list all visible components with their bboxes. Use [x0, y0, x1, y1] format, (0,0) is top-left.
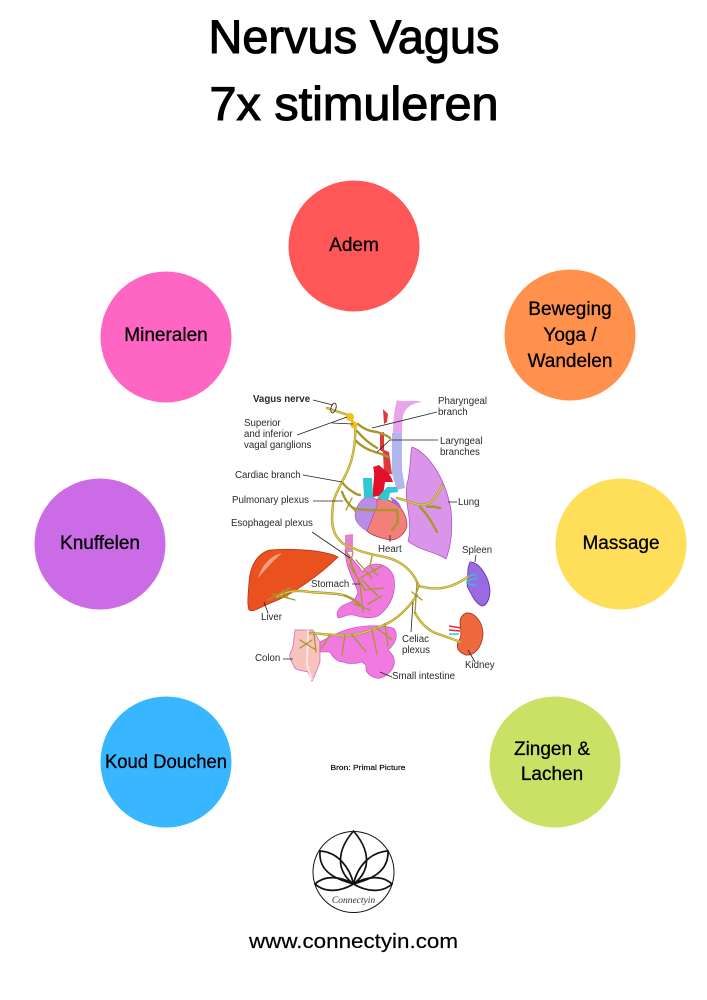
circle: Beweging Yoga / Wandelen: Beweging — [528, 299, 612, 320]
circle: Zingen & Lachen: Lachen — [521, 764, 583, 785]
circle: Beweging Yoga / Wandelen — [504, 270, 636, 400]
website url: www.connectyin.com — [248, 930, 458, 953]
anatomical diagram: vagus nerve: Laryngeal — [440, 436, 483, 447]
circle: Mineralen: Mineralen — [124, 325, 208, 346]
anatomical diagram: vagus nerve: Kidney — [465, 660, 495, 671]
leader lines — [264, 400, 476, 677]
title: Nervus Vagus — [208, 10, 500, 63]
anatomical diagram: vagus nerve: Heart — [378, 544, 402, 555]
title: 7x stimuleren — [210, 77, 498, 130]
anatomical diagram: vagus nerve: branches — [440, 447, 480, 458]
anatomical diagram: vagus nerve: Colon — [255, 653, 280, 664]
organ: kidney — [457, 613, 483, 655]
anatomical diagram: vagus nerve: Pulmonary plexus — [232, 495, 309, 506]
logo: Connectyin lotus — [313, 831, 394, 912]
circle: Beweging Yoga / Wandelen: Wandelen — [528, 351, 612, 372]
circle: Beweging Yoga / Wandelen: Yoga / — [543, 325, 597, 346]
anatomical diagram: vagus nerve: Cardiac branch — [235, 470, 301, 481]
anatomical diagram: vagus nerve: vagal ganglions — [244, 440, 311, 451]
anatomical diagram: vagus nerve: Celiac — [402, 634, 429, 645]
ganglia — [346, 413, 358, 428]
vagus nerve branches — [268, 408, 468, 655]
organ: esophagus — [345, 534, 353, 552]
title — [208, 10, 500, 130]
anatomical diagram: vagus nerve: Liver — [261, 612, 283, 623]
circle: Koud Douchen — [100, 696, 232, 828]
source caption: Bron: Primal Picture — [330, 763, 406, 772]
circle: Koud Douchen: Koud Douchen — [105, 752, 227, 773]
organ: small intestine — [320, 626, 396, 678]
organ: pharynx — [393, 400, 422, 434]
anatomical diagram: vagus nerve: Superior — [244, 418, 281, 429]
circle: Mineralen — [100, 272, 232, 402]
organ: stomach — [337, 550, 394, 618]
organ: arteries in neck — [380, 409, 392, 474]
organ: heart — [366, 499, 407, 540]
logo: Connectyin lotus: Connectyin — [332, 896, 375, 906]
circle: Zingen & Lachen — [490, 696, 620, 828]
anatomical diagram: vagus nerve: plexus — [402, 645, 430, 656]
diagram labels: Vagus nerve — [253, 394, 311, 405]
circle: Massage — [556, 478, 686, 610]
circle: Adem — [288, 180, 420, 312]
circle: Adem: Adem — [329, 235, 379, 256]
anatomical diagram: vagus nerve: Stomach — [311, 579, 349, 590]
anatomical diagram: vagus nerve — [231, 394, 495, 682]
anatomical diagram: vagus nerve: Spleen — [462, 545, 492, 556]
vagus nerve clamp — [330, 403, 337, 413]
circle: Knuffelen — [34, 478, 166, 610]
anatomical diagram: vagus nerve: Pharyngeal — [438, 396, 487, 407]
anatomical diagram: vagus nerve: Esophageal plexus — [231, 518, 313, 529]
organ: spleen — [467, 562, 490, 606]
anatomical diagram: vagus nerve: Small intestine — [392, 671, 455, 682]
circle: Massage: Massage — [582, 533, 660, 554]
circle: Zingen & Lachen: Zingen & — [514, 739, 590, 760]
circle: Knuffelen: Knuffelen — [60, 533, 140, 554]
anatomical diagram: vagus nerve: Lung — [458, 497, 480, 508]
organ: colon — [290, 630, 320, 681]
organ: trachea — [392, 433, 405, 490]
organ: lung — [406, 447, 452, 559]
organ: liver — [248, 549, 338, 611]
anatomical diagram: vagus nerve: branch — [438, 407, 468, 418]
organ: great vessels — [363, 478, 373, 498]
anatomical diagram: vagus nerve: and inferior — [244, 429, 293, 440]
